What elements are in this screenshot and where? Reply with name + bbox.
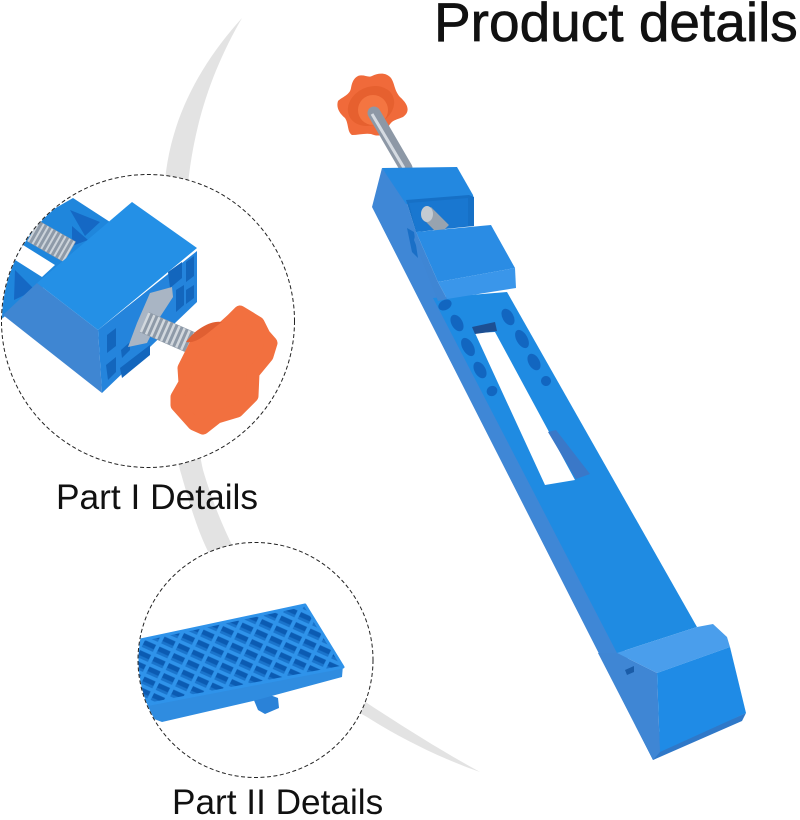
orange knob	[177, 312, 271, 428]
front screw	[144, 322, 192, 343]
hook	[253, 695, 279, 714]
inner lattice	[407, 228, 418, 258]
rear rails with lattice	[0, 198, 110, 320]
rear screw	[33, 231, 70, 252]
slot	[12, 245, 55, 277]
detail circle: Part I	[0, 174, 294, 468]
end stop block	[598, 624, 746, 760]
inner screw	[426, 212, 444, 230]
sliding front block	[414, 225, 516, 301]
block side face	[3, 283, 102, 393]
block top face	[37, 202, 197, 330]
threaded rod	[372, 113, 406, 168]
rear block	[382, 167, 474, 258]
label: Part I Details: Part I Details	[56, 478, 258, 517]
lattice top face	[136, 605, 343, 704]
lip front face	[146, 668, 343, 722]
long body side wall	[372, 168, 668, 760]
main product: clamp tool	[337, 74, 746, 760]
orange knob, top	[337, 74, 408, 136]
lattice ribs	[436, 297, 553, 398]
block front face	[98, 251, 197, 393]
detail circle: Part II	[136, 542, 373, 778]
background grey arc	[164, 18, 480, 772]
long body top face with slot	[433, 292, 697, 653]
washer	[128, 287, 173, 347]
